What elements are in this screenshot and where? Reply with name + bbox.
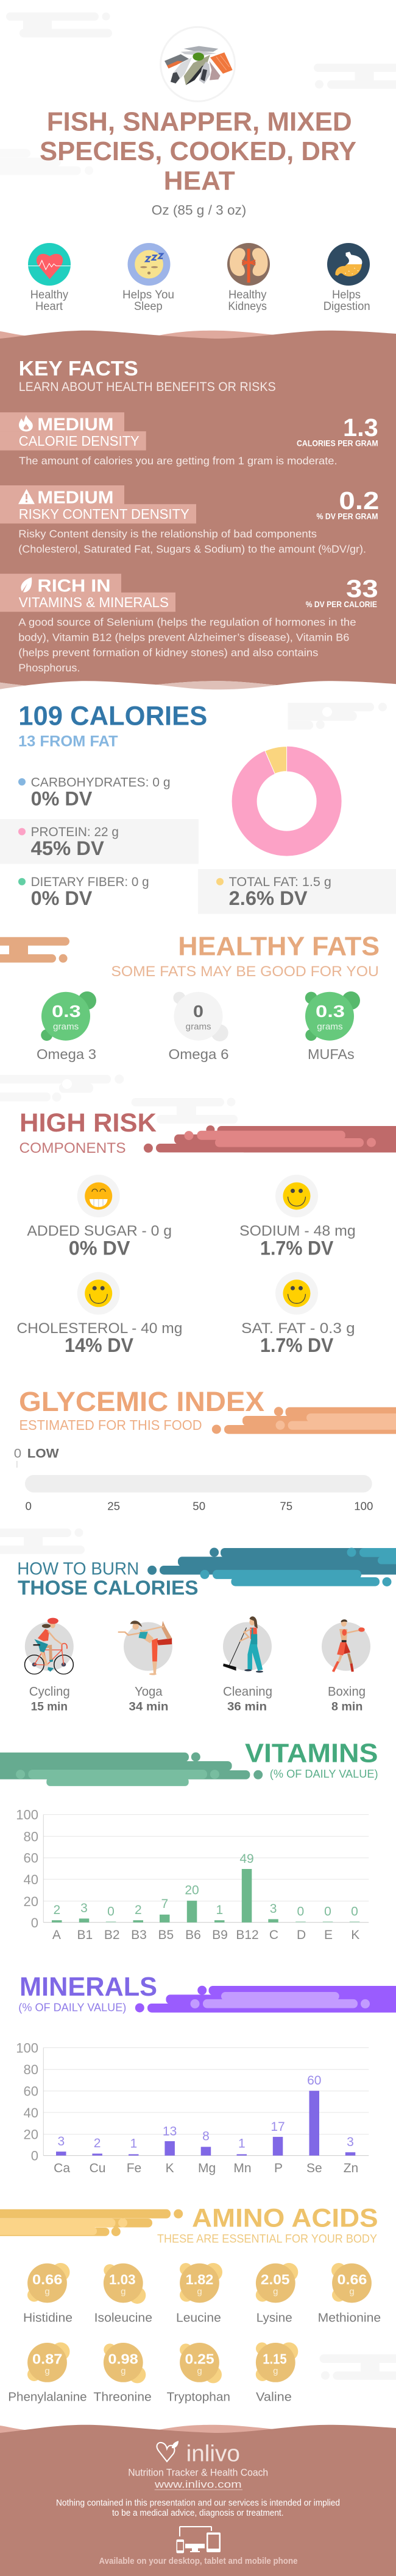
macro: total fat: TOTAL FAT: 1.5 g — [229, 875, 331, 889]
fact: calorie density: 1.3 — [343, 413, 378, 442]
bar chart: minerals: 0 — [31, 2148, 38, 2164]
bar chart: minerals: 60 — [24, 2084, 38, 2099]
amino: methionine: g — [349, 2287, 355, 2297]
amino: threonine — [93, 2343, 152, 2404]
activity: yoga: 34 min — [129, 1701, 168, 1714]
fat: mufas — [305, 991, 360, 1062]
icon: warning triangle — [18, 489, 35, 504]
activity: cycling: 15 min — [31, 1701, 68, 1714]
fat: omega 6: 0 — [193, 1002, 203, 1021]
amino: methionine: Methionine — [318, 2311, 381, 2324]
panel: minerals — [16, 1972, 396, 2175]
icon: healthy kidneys — [227, 243, 270, 313]
subheading: percent daily value: (% OF DAILY VALUE) — [270, 1768, 378, 1780]
fact: rich in vitamins and minerals: Phosphorus. — [18, 661, 80, 674]
component: cholesterol: 14% DV — [65, 1334, 134, 1356]
amino: isoleucine — [94, 2264, 152, 2324]
amino: leucine: Leucine — [176, 2311, 221, 2324]
panel: amino acids — [0, 2203, 381, 2404]
panel: calories — [0, 702, 396, 914]
panel: footer — [0, 2425, 396, 2576]
glycemic scale bar: 50 — [193, 1500, 205, 1513]
subheading: from fat: 13 FROM FAT — [18, 733, 118, 750]
title — [40, 107, 356, 196]
amino: lysine: 2.05 — [261, 2272, 290, 2287]
activity: yoga — [118, 1621, 172, 1714]
amino: valine — [256, 2342, 298, 2404]
subheading: key facts: LEARN ABOUT HEALTH BENEFITS OR RISKS — [19, 380, 276, 394]
heading: amino acids: AMINO ACIDS — [192, 2203, 378, 2233]
fact: rich in vitamins and minerals: % DV PER CALORIE — [306, 600, 377, 609]
amino: tryptophan: g — [197, 2366, 202, 2376]
amino: phenylalanine: 0.87 — [32, 2351, 62, 2367]
bar chart: minerals: 3 — [57, 2134, 65, 2148]
heading: minerals: MINERALS — [19, 1972, 157, 2002]
panel: key facts — [0, 331, 396, 689]
bar chart: minerals: 40 — [24, 2105, 38, 2120]
bar chart: minerals: 80 — [24, 2062, 38, 2077]
glycemic value marker: 0 — [14, 1447, 21, 1460]
amino: phenylalanine: Phenylalanine — [8, 2390, 87, 2404]
bar chart: minerals: 1 — [238, 2137, 246, 2151]
serving size: Oz (85 g / 3 oz) — [152, 202, 246, 217]
icon: healthy kidneys: Healthy — [228, 289, 267, 301]
subheading: components: COMPONENTS — [19, 1140, 126, 1156]
amino: leucine — [176, 2263, 222, 2324]
fact: calorie density: The amount of calories you are getting from 1 gram is moderate. — [19, 454, 338, 466]
macro: carbohydrates: CARBOHYDRATES: 0 g — [31, 775, 171, 789]
amino: histidine — [23, 2263, 72, 2324]
component: added sugar — [27, 1175, 172, 1259]
bar chart: minerals: Cu — [90, 2161, 105, 2175]
fat: omega 6 — [168, 992, 229, 1062]
fact: risky content density: Risky Content density is the relationship of bad components — [18, 527, 317, 540]
fat: omega 3: grams — [53, 1022, 79, 1032]
heading: vitamins: VITAMINS — [245, 1739, 378, 1768]
amino: leucine: 1.82 — [186, 2272, 213, 2287]
donut chart — [244, 747, 329, 843]
fat: omega 3: Omega 3 — [37, 1046, 96, 1062]
fact: risky content density: (Cholesterol, Saturated Fat, Sugars & Sodium) to the amount (%DV/gr). — [18, 543, 366, 555]
heading: healthy fats: HEALTHY FATS — [178, 932, 380, 961]
panel: glycemic index — [14, 1386, 396, 1513]
icon: leaf — [21, 577, 32, 592]
bar chart: vitamins: B12 — [236, 1928, 259, 1942]
bar chart: vitamins: 2 — [135, 1903, 142, 1917]
heading: how to burn: HOW TO BURN — [17, 1559, 139, 1578]
bar chart: vitamins: K — [351, 1928, 359, 1942]
activity: cleaning: Cleaning — [223, 1685, 272, 1699]
bar chart: minerals: 13 — [163, 2124, 177, 2138]
component: saturated fat: 1.7% DV — [260, 1334, 334, 1356]
activity: boxing: Boxing — [328, 1685, 366, 1699]
bar chart: vitamins: B9 — [212, 1928, 228, 1942]
component: cholesterol — [16, 1272, 182, 1356]
fact: risky content density: 0.2 — [339, 487, 379, 515]
fat: omega 6: Omega 6 — [168, 1046, 229, 1062]
amino: lysine: g — [273, 2287, 278, 2297]
bar chart: minerals: 17 — [270, 2120, 285, 2134]
panel: vitamins — [0, 1739, 378, 1942]
bar chart: vitamins: 3 — [270, 1902, 277, 1916]
bar chart: minerals: 3 — [347, 2135, 354, 2149]
tagline: Nutrition Tracker & Health Coach — [128, 2467, 268, 2478]
component: cholesterol: CHOLESTEROL - 40 mg — [16, 1320, 182, 1337]
amino: valine: g — [273, 2366, 278, 2376]
fact: calorie density: CALORIES PER GRAM — [297, 438, 378, 448]
icon: helps you sleep: Sleep — [134, 300, 163, 313]
amino: tryptophan: Tryptophan — [167, 2390, 230, 2404]
fact: calorie density — [0, 412, 378, 466]
amino: histidine: 0.66 — [32, 2272, 62, 2287]
amino: methionine — [318, 2263, 381, 2324]
bar chart: vitamins: 3 — [80, 1901, 88, 1915]
amino: methionine: 0.66 — [338, 2272, 367, 2287]
amino: lysine — [256, 2263, 298, 2324]
bar chart: minerals: Se — [306, 2161, 322, 2175]
fact: risky content density: % DV PER GRAM — [317, 512, 378, 521]
disclaimer: Nothing contained in this presentation and our services is intended or implied — [56, 2498, 340, 2508]
website link: www.inlivo.com — [154, 2479, 242, 2490]
logo: inlivo: inlivo — [186, 2441, 240, 2467]
glycemic scale bar: 100 — [354, 1500, 373, 1513]
bar chart: vitamins: 0 — [31, 1915, 38, 1930]
title: HEAT — [164, 166, 235, 196]
fact: risky content density — [0, 485, 379, 555]
icon: healthy kidneys: Kidneys — [228, 300, 267, 313]
heading: calories: 109 CALORIES — [18, 702, 207, 731]
bar chart: vitamins: E — [324, 1928, 333, 1942]
component: added sugar: 0% DV — [69, 1237, 130, 1259]
icon: healthy heart — [28, 243, 71, 313]
bar chart: minerals: 20 — [24, 2127, 38, 2142]
bar chart: vitamins: 7 — [161, 1897, 168, 1911]
icon: healthy heart: Heart — [35, 300, 63, 313]
bar chart: minerals: 1 — [130, 2137, 137, 2151]
glycemic scale bar: 0 — [26, 1500, 32, 1513]
fact: calorie density: MEDIUM — [37, 415, 113, 434]
icon: helps you sleep — [122, 243, 174, 313]
heading: those calories: THOSE CALORIES — [18, 1577, 199, 1599]
bar chart: minerals: P — [274, 2161, 283, 2175]
bar chart: vitamins: 2 — [53, 1903, 60, 1917]
bar chart: minerals: 60 — [307, 2074, 321, 2088]
activity: cleaning: 36 min — [227, 1701, 267, 1714]
activity: cleaning — [223, 1616, 272, 1714]
fat: mufas: 0.3 — [316, 1002, 345, 1021]
activity: cycling — [25, 1618, 74, 1714]
fact: rich in vitamins and minerals: body), Vitamin B12 (helps prevent Alzheimer’s disease), Vitamin B6 — [18, 631, 349, 643]
bar chart: minerals: Fe — [127, 2161, 141, 2175]
fat: omega 3: 0.3 — [52, 1002, 81, 1021]
bar chart: minerals: Mg — [198, 2161, 216, 2175]
amino: phenylalanine: g — [44, 2366, 50, 2376]
amino: threonine: 0.98 — [108, 2351, 138, 2367]
glycemic value marker: LOW — [27, 1447, 59, 1460]
amino: phenylalanine — [8, 2342, 87, 2404]
amino: valine: Valine — [256, 2390, 292, 2404]
icon: healthy heart: Healthy — [30, 289, 68, 301]
fat: mufas: MUFAs — [308, 1046, 355, 1062]
fact: rich in vitamins and minerals — [0, 574, 378, 674]
macro: protein: PROTEIN: 22 g — [31, 825, 119, 839]
bar chart: vitamins: C — [269, 1928, 278, 1942]
icon: helps digestion: Helps — [332, 289, 361, 301]
component: sodium: 1.7% DV — [260, 1237, 334, 1259]
fact: rich in vitamins and minerals: (helps prevent formation of kidney stones) and also contains — [18, 647, 319, 659]
fat: mufas: grams — [317, 1022, 343, 1032]
activity: boxing — [322, 1619, 370, 1714]
benefit icons row — [28, 243, 370, 313]
icon: flame — [19, 415, 33, 431]
panel: healthy fats — [0, 932, 380, 1062]
amino: isoleucine: Isoleucine — [94, 2311, 152, 2324]
subheading: essential: THESE ARE ESSENTIAL FOR YOUR BODY — [157, 2232, 377, 2245]
bar chart: vitamins: 0 — [351, 1905, 358, 1919]
component: added sugar: ADDED SUGAR - 0 g — [27, 1223, 172, 1239]
bar chart: vitamins: 0 — [297, 1905, 304, 1919]
disclaimer: to be a medical advice, diagnosis or treatment. — [112, 2508, 284, 2518]
subheading: estimated: ESTIMATED FOR THIS FOOD — [19, 1417, 202, 1433]
bar chart: vitamins: B3 — [131, 1928, 147, 1942]
bar chart: vitamins: 0 — [324, 1905, 331, 1919]
glycemic scale bar — [25, 1475, 373, 1513]
fat: omega 6: grams — [186, 1022, 211, 1032]
subheading: healthy fats: SOME FATS MAY BE GOOD FOR YOU — [111, 963, 379, 980]
amino: threonine: g — [121, 2366, 126, 2376]
macro: dietary fiber: 0% DV — [31, 887, 93, 909]
macro: carbohydrates — [18, 775, 171, 809]
activity: yoga: Yoga — [135, 1685, 163, 1699]
macro: carbohydrates: 0% DV — [31, 787, 93, 809]
fact: risky content density: MEDIUM — [37, 488, 113, 507]
macro: total fat: 2.6% DV — [229, 887, 308, 909]
amino: lysine: Lysine — [256, 2311, 292, 2324]
bar chart: minerals: Mn — [233, 2161, 252, 2175]
glycemic scale bar: 75 — [280, 1500, 292, 1513]
bar chart: vitamins — [16, 1807, 369, 1942]
activity: cycling: Cycling — [29, 1685, 70, 1699]
macro: protein: 45% DV — [31, 837, 104, 859]
fact: rich in vitamins and minerals: VITAMINS & MINERALS — [19, 594, 169, 610]
disclaimer — [56, 2498, 340, 2518]
bar chart: vitamins: 40 — [24, 1872, 38, 1887]
heading: key facts: KEY FACTS — [19, 357, 138, 380]
bar chart: vitamins: 20 — [24, 1894, 38, 1909]
bar chart: vitamins: A — [52, 1928, 61, 1942]
panel: high risk components — [16, 1108, 396, 1356]
glycemic scale bar: 25 — [107, 1500, 120, 1513]
icon: devices — [177, 2527, 221, 2553]
fact: rich in vitamins and minerals: 33 — [346, 575, 378, 603]
fat: omega 3 — [37, 991, 96, 1062]
bar chart: minerals: Zn — [344, 2161, 358, 2175]
fact: calorie density: CALORIE DENSITY — [19, 433, 140, 449]
bar chart: vitamins: 60 — [24, 1851, 38, 1866]
bar chart: vitamins: B2 — [104, 1928, 120, 1942]
activity: boxing: 8 min — [331, 1701, 362, 1714]
fact: risky content density: RISKY CONTENT DENSITY — [19, 506, 189, 522]
macro: dietary fiber — [18, 875, 149, 909]
amino: isoleucine: g — [121, 2287, 126, 2297]
bar chart: vitamins: 20 — [185, 1884, 199, 1898]
bar chart: minerals: Ca — [54, 2161, 70, 2175]
bar chart: vitamins: B6 — [185, 1928, 201, 1942]
bar chart: vitamins: D — [297, 1928, 306, 1942]
bar chart: vitamins: 49 — [239, 1852, 254, 1866]
bar chart: vitamins: 80 — [24, 1829, 38, 1844]
bar chart: minerals: 8 — [202, 2130, 210, 2144]
component: saturated fat — [241, 1272, 355, 1356]
amino: histidine: Histidine — [23, 2311, 72, 2324]
component: sodium: SODIUM - 48 mg — [239, 1223, 356, 1239]
title: FISH, SNAPPER, MIXED — [47, 107, 352, 136]
heading: glycemic index: GLYCEMIC INDEX — [19, 1386, 265, 1417]
component: sodium — [239, 1175, 356, 1259]
bar chart: minerals: 100 — [16, 2040, 38, 2056]
macro: total fat — [198, 869, 396, 914]
icon: helps digestion: Digestion — [324, 300, 370, 313]
amino: histidine: g — [44, 2287, 50, 2297]
glycemic value marker — [14, 1447, 59, 1468]
amino: isoleucine: 1.03 — [109, 2272, 136, 2287]
macro: protein — [0, 819, 199, 864]
macro: dietary fiber: DIETARY FIBER: 0 g — [31, 875, 149, 889]
bar chart: vitamins: B1 — [77, 1928, 93, 1942]
icon: helps you sleep: Helps You — [122, 289, 174, 301]
amino: valine: 1.15 — [263, 2351, 287, 2367]
subheading: percent daily value: (% OF DAILY VALUE) — [18, 2001, 126, 2013]
bar chart: minerals — [16, 2040, 369, 2175]
availability note: Available on your desktop, tablet and mobile phone — [99, 2557, 297, 2566]
bar chart: vitamins: 0 — [107, 1905, 115, 1919]
fact: rich in vitamins and minerals: A good source of Selenium (helps the regulation of hormones in the — [18, 616, 356, 628]
amino: tryptophan: 0.25 — [185, 2351, 214, 2367]
panel: how to burn those calories — [17, 1548, 396, 1714]
bar chart: minerals: K — [166, 2161, 174, 2175]
amino: threonine: Threonine — [93, 2390, 152, 2404]
title: SPECIES, COOKED, DRY — [40, 136, 356, 166]
bar chart: minerals: 2 — [94, 2136, 101, 2150]
heading: high risk: HIGH RISK — [19, 1108, 157, 1138]
component: saturated fat: SAT. FAT - 0.3 g — [241, 1320, 355, 1337]
bar chart: vitamins: 100 — [16, 1807, 38, 1823]
bar chart: vitamins: 1 — [216, 1903, 223, 1917]
fact: rich in vitamins and minerals: RICH IN — [37, 576, 111, 596]
amino: tryptophan — [167, 2343, 230, 2404]
icon: helps digestion — [324, 243, 370, 313]
bar chart: vitamins: B5 — [158, 1928, 174, 1942]
logo: inlivo — [157, 2441, 240, 2467]
amino: leucine: g — [197, 2287, 202, 2297]
food image: mixed fish — [161, 27, 235, 101]
